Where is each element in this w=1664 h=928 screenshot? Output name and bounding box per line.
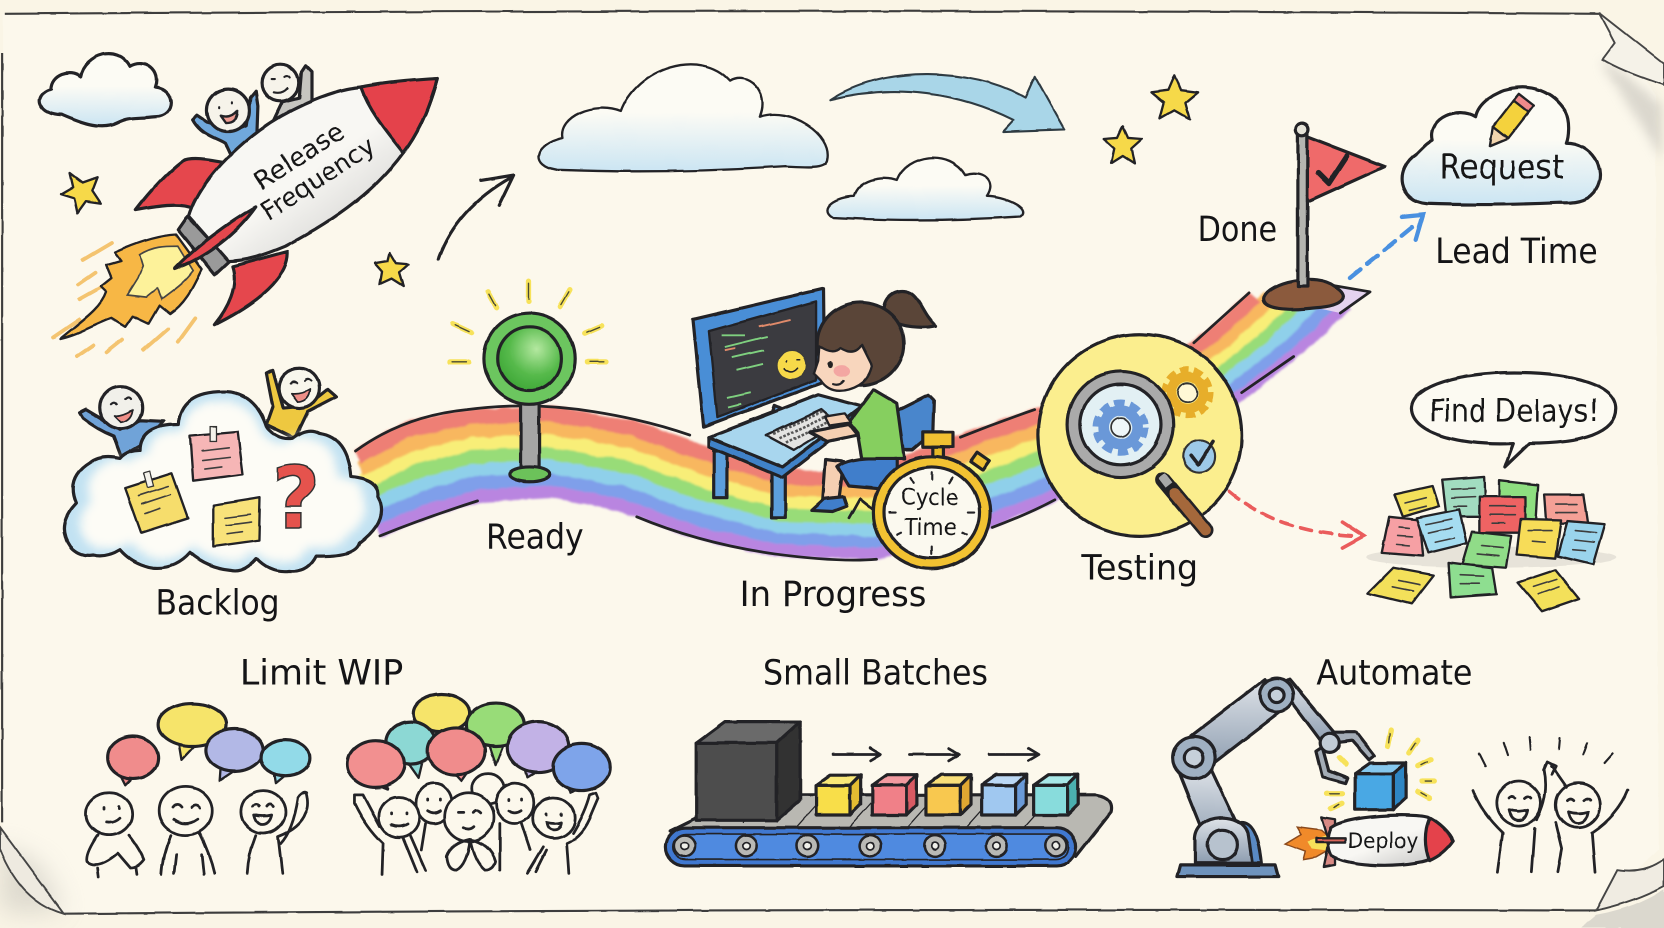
large black batch	[696, 722, 800, 820]
page curl: bottom right	[1581, 860, 1664, 927]
smiley	[777, 350, 807, 380]
person: arms crossed	[86, 793, 144, 877]
star: left of rocket	[60, 173, 101, 213]
monitor	[693, 289, 825, 427]
speech bubble: Find Delays	[1411, 372, 1616, 467]
question mark: ?	[271, 449, 321, 548]
rainbow road	[358, 297, 1346, 553]
green signal	[450, 281, 606, 482]
robot arm	[1173, 678, 1374, 877]
label: In Progress: In Progress	[740, 575, 926, 615]
mini rocket: Deploy: Deploy	[1348, 829, 1418, 854]
rocket: Release Frequency: Frequency	[256, 131, 381, 227]
lower fin	[214, 251, 288, 325]
crowded team with many bubbles	[347, 694, 610, 874]
check badge	[1183, 440, 1215, 472]
testing: magnifier circle	[1038, 334, 1242, 536]
passenger: blue	[193, 89, 258, 159]
bubble: teal	[386, 722, 435, 778]
arrows	[833, 748, 1039, 761]
star: below rocket	[375, 253, 409, 287]
pole	[1298, 133, 1307, 287]
cloud: small centre	[827, 158, 1023, 220]
rocket: Release Frequency: Release	[249, 117, 350, 197]
person: smiling	[159, 786, 214, 874]
small batch: yellow	[816, 775, 861, 815]
arrow: rocket rising	[438, 175, 514, 259]
mini rocket: Deploy	[1285, 815, 1453, 867]
label: Done: Done	[1198, 210, 1277, 250]
cloud: Request: Request	[1440, 147, 1564, 187]
stopwatch: Cycle Time: Cycle	[900, 483, 959, 511]
bubble: cyan	[261, 740, 310, 783]
arrow: sweeping blue	[830, 74, 1064, 132]
pennant	[1307, 137, 1385, 202]
gear: blue	[1097, 404, 1144, 451]
small batch: amber	[926, 775, 971, 815]
chair	[892, 395, 934, 450]
bubble: green	[467, 704, 524, 765]
rollers	[674, 835, 1067, 856]
cloud body	[64, 392, 382, 571]
bubble: pink	[347, 741, 404, 790]
blue band	[665, 828, 1076, 866]
flame	[53, 235, 202, 357]
label: Ready: Ready	[486, 518, 584, 558]
bubble: yellow	[413, 694, 470, 732]
sticky note: yellow	[125, 472, 188, 533]
cloud: top left	[40, 54, 171, 126]
person: waving	[241, 791, 308, 873]
stopwatch: Cycle Time: Time	[904, 513, 957, 541]
bubble: red	[428, 728, 485, 781]
torso	[849, 389, 904, 458]
small batch: red	[872, 775, 917, 815]
arms	[810, 424, 857, 441]
handle	[1162, 475, 1206, 531]
upper fin	[136, 159, 228, 210]
bubble: purple	[507, 722, 569, 778]
page curl: top right	[1599, 13, 1664, 159]
person: blue	[80, 386, 163, 456]
label: Testing: Testing	[1080, 548, 1198, 588]
arrow: blue dashed	[1350, 214, 1423, 278]
label: Lead Time: Lead Time	[1435, 232, 1598, 272]
body	[189, 79, 437, 261]
small batch: teal	[1034, 775, 1078, 815]
small team with few bubbles	[86, 704, 310, 877]
speech bubble: Find Delays: Find Delays!	[1429, 393, 1599, 429]
star: upper right large	[1151, 75, 1198, 119]
cloud: top centre	[539, 64, 828, 171]
conveyor belt	[665, 722, 1112, 866]
belt top and end	[670, 795, 1112, 856]
backlog cloud	[64, 368, 382, 571]
sticky note: small yellow	[213, 498, 260, 547]
coder at desk	[693, 289, 936, 518]
bubble: purple	[206, 729, 263, 781]
small batch: blue	[982, 775, 1026, 815]
glowing cube	[1327, 730, 1435, 810]
rainbow road outlines	[356, 284, 1370, 560]
mound	[1264, 279, 1343, 309]
passenger: grey	[262, 64, 312, 120]
gear: yellow	[1166, 371, 1209, 414]
legs	[822, 459, 844, 504]
bubble: yellow	[158, 704, 226, 760]
label: Small Batches: Small Batches	[763, 653, 988, 693]
stopwatch: Cycle Time	[873, 432, 990, 569]
cheering pair	[1473, 738, 1628, 872]
label: Backlog: Backlog	[155, 583, 280, 623]
rocket: Release Frequency	[53, 64, 437, 357]
sticky note: pink	[190, 427, 243, 481]
arrow: red dashed	[1229, 491, 1364, 548]
label: Limit WIP: Limit WIP	[240, 653, 403, 693]
rainbow road end flap	[1316, 284, 1370, 313]
pile of sticky notes	[1366, 476, 1616, 611]
bubble: pink	[107, 736, 158, 785]
desk	[709, 395, 862, 518]
person: yellow	[266, 368, 336, 438]
lens	[1068, 371, 1174, 478]
pencil	[1483, 94, 1534, 152]
flag: Done	[1264, 123, 1385, 309]
nozzle	[178, 216, 229, 275]
page curl: bottom left	[0, 828, 64, 914]
bubble: blue	[553, 744, 610, 793]
label: Automate: Automate	[1316, 653, 1472, 693]
crowd of people	[354, 774, 599, 874]
nose	[361, 79, 437, 153]
keyboard	[766, 410, 837, 450]
star: upper right small	[1104, 126, 1142, 163]
head	[814, 291, 936, 391]
cloud: Request	[1402, 87, 1600, 205]
centre fin	[175, 207, 256, 268]
